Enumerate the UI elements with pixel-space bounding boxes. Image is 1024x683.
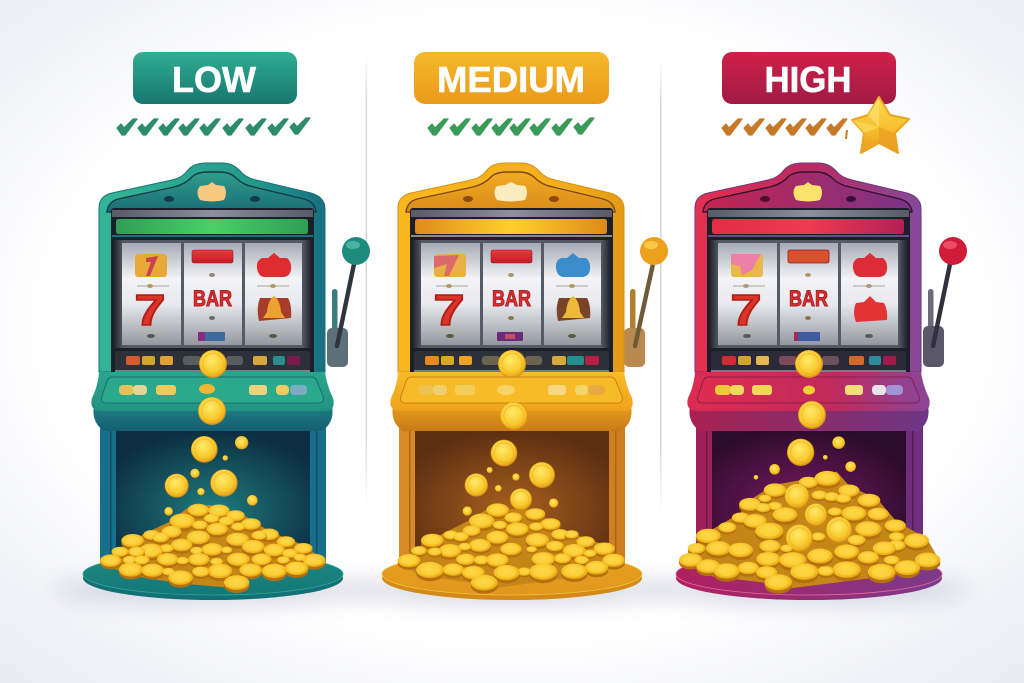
lower cabinet xyxy=(399,426,625,562)
reel symbol: red seven: 7 xyxy=(134,286,166,335)
coin: strip xyxy=(498,350,526,378)
coin: strip xyxy=(199,350,227,378)
crown lamp xyxy=(198,182,226,202)
falling coins xyxy=(164,436,258,516)
reel symbol: badge xyxy=(497,332,523,341)
screen frame xyxy=(707,208,910,376)
reel symbol: badge xyxy=(198,332,225,341)
marquee bar xyxy=(116,219,308,234)
divider: medium and high xyxy=(660,58,662,513)
upper cabinet xyxy=(695,163,921,372)
coin tray base xyxy=(382,553,642,600)
reel symbol: bell xyxy=(557,296,590,321)
lever xyxy=(624,237,668,367)
console xyxy=(91,372,334,431)
base shadow xyxy=(53,576,373,604)
reels xyxy=(718,243,898,345)
reel symbol: red bar xyxy=(192,250,233,263)
icon: gold star xyxy=(852,97,909,153)
screen frame xyxy=(410,208,613,376)
coin pile xyxy=(100,504,326,593)
heading: HIGH badge xyxy=(722,52,896,104)
coin: console xyxy=(798,401,826,429)
reel symbol: BAR: BAR xyxy=(193,286,232,311)
console xyxy=(390,372,633,431)
lever xyxy=(327,237,370,367)
reel symbol: red blob xyxy=(853,253,887,277)
console buttons xyxy=(418,385,605,395)
crown lamp xyxy=(794,182,822,202)
reel symbol: mixed seven xyxy=(135,254,167,277)
reels xyxy=(421,243,601,345)
lower cabinet xyxy=(696,426,923,562)
heading: MEDIUM badge xyxy=(414,52,609,104)
coin pile xyxy=(679,471,940,594)
screen frame xyxy=(111,208,314,376)
lever xyxy=(923,237,967,367)
divider: low and medium xyxy=(366,55,367,505)
console buttons xyxy=(119,384,307,395)
falling coins xyxy=(754,436,856,480)
reels xyxy=(122,243,302,345)
slot machine: medium xyxy=(352,163,672,604)
base shadow xyxy=(352,576,672,604)
marquee bar xyxy=(415,219,607,234)
console xyxy=(687,372,930,431)
reel symbol: red bar xyxy=(491,250,532,263)
reel symbol: BAR: BAR xyxy=(492,286,531,311)
marquee bar xyxy=(712,219,904,234)
coin: console xyxy=(198,397,226,425)
lower cabinet xyxy=(100,426,326,562)
reel symbol: blue blob xyxy=(556,253,590,277)
reel symbol: badge xyxy=(794,332,820,341)
heading: HIGH badge: HIGH xyxy=(764,59,852,100)
reel symbol: mixed seven xyxy=(731,254,763,277)
reel symbol: red blob xyxy=(257,253,291,277)
slot machine: low xyxy=(53,163,373,604)
heading: LOW badge xyxy=(133,52,297,104)
coin tray base xyxy=(83,553,343,600)
coin: console xyxy=(500,402,528,430)
indicator light strip xyxy=(115,351,310,372)
upper cabinet xyxy=(398,163,624,372)
slot machine: high xyxy=(649,163,969,604)
checkmarks: medium row xyxy=(428,118,594,135)
crown lamp xyxy=(494,182,527,202)
checkmarks: low row xyxy=(117,118,310,135)
falling coins xyxy=(463,440,558,516)
coin tray base xyxy=(676,553,942,600)
coin pile xyxy=(398,503,625,594)
console buttons xyxy=(715,385,903,395)
heading: LOW badge: LOW xyxy=(172,59,256,100)
reel symbol: bell xyxy=(258,296,291,321)
reel symbol: mixed seven xyxy=(434,254,466,277)
coin: strip xyxy=(795,350,823,378)
indicator light strip xyxy=(414,351,609,372)
base shadow xyxy=(649,576,969,604)
reel symbol: BAR: BAR xyxy=(789,286,828,311)
reel symbol: red seven: 7 xyxy=(730,286,762,335)
upper cabinet xyxy=(99,163,325,372)
reel symbol: red gem xyxy=(854,296,887,322)
reel symbol: red bar xyxy=(788,250,829,263)
checkmarks: high row xyxy=(722,119,848,139)
indicator light strip xyxy=(711,351,906,372)
reel symbol: red seven: 7 xyxy=(434,286,464,335)
heading: MEDIUM badge: MEDIUM xyxy=(437,59,585,100)
